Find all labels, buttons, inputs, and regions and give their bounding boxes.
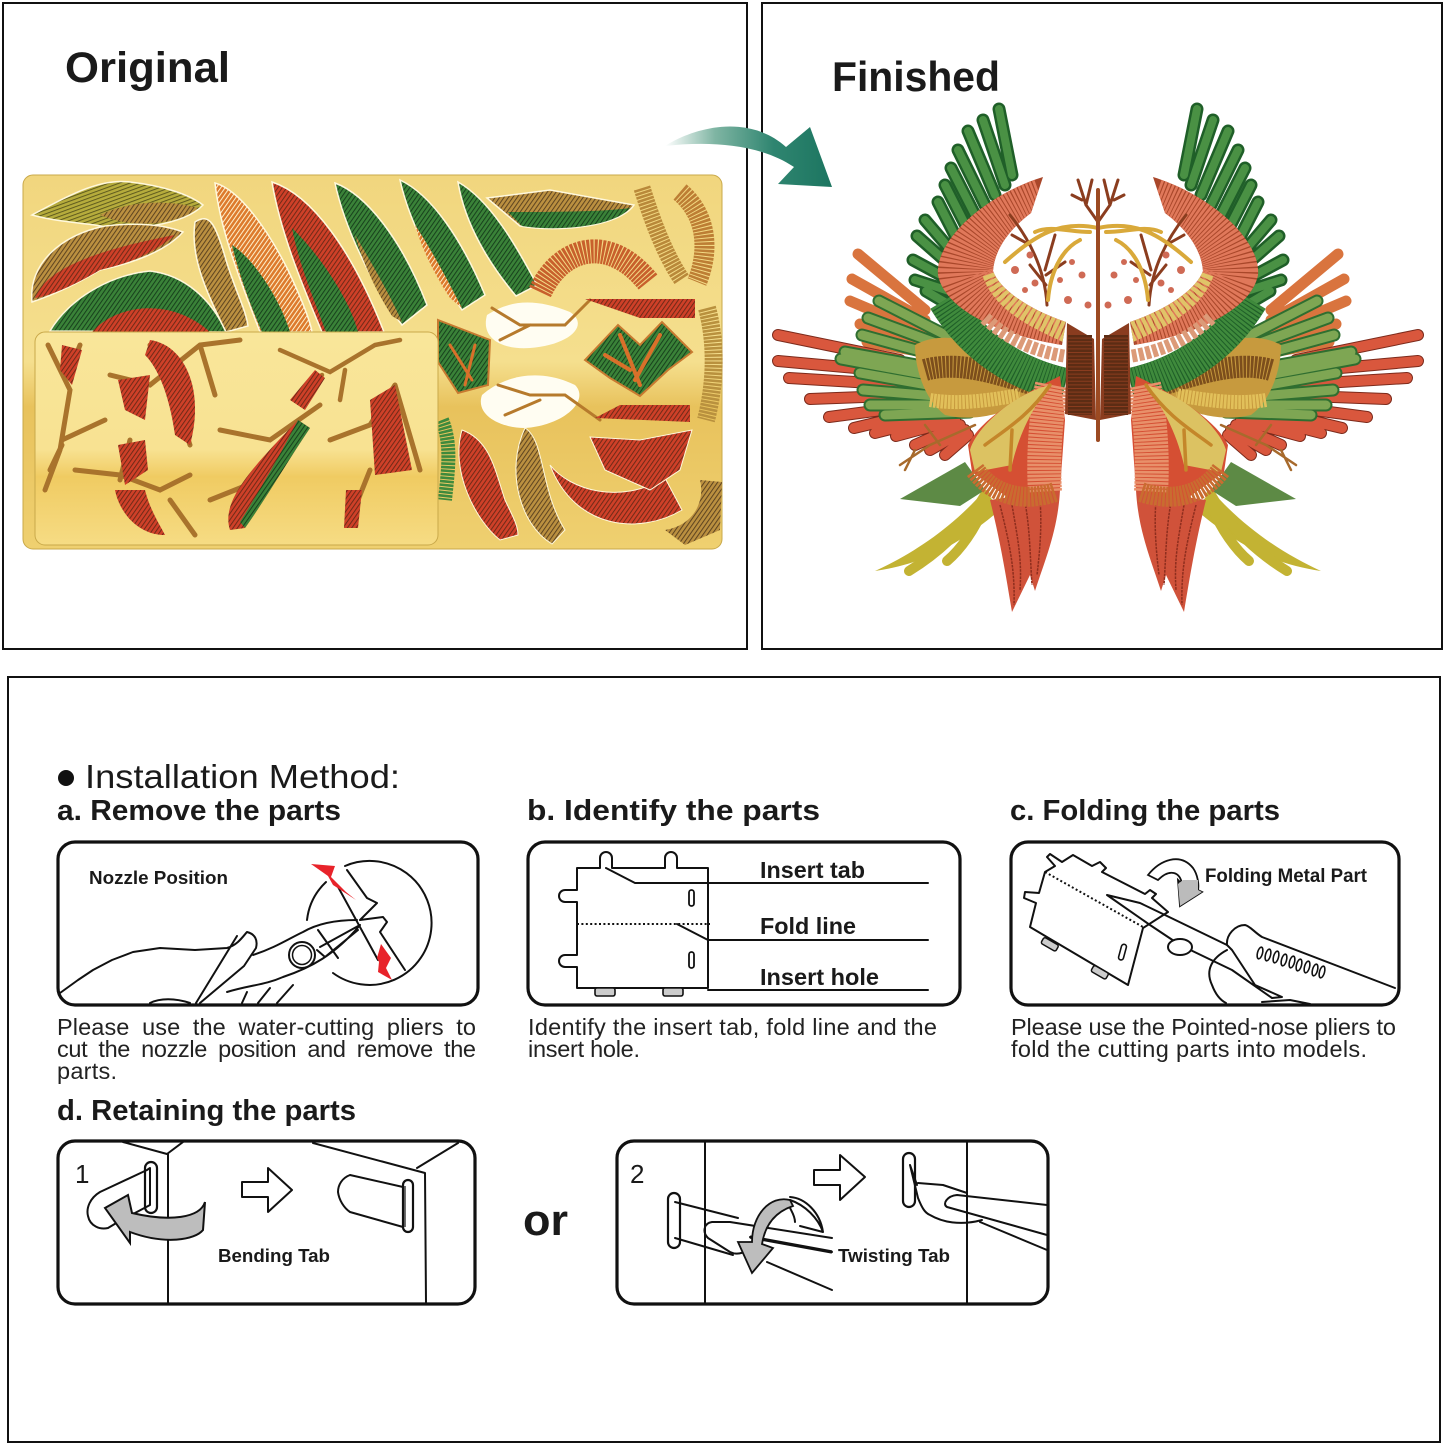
instruction a: Please use the water-cutting pliers to (57, 1014, 476, 1040)
heading a: a. Remove the parts (57, 795, 341, 827)
illustration 2: twisting tab (617, 1141, 1048, 1304)
illustration: pliers cutting nozzle: Nozzle Position (89, 868, 228, 888)
illustration 1: bending tab (58, 1141, 475, 1304)
step a (57, 795, 478, 1084)
red wing part (32, 224, 183, 302)
illustration 1: bending tab: Bending Tab (218, 1246, 330, 1266)
illustration: metal part diagram: Insert tab (760, 857, 865, 883)
heading: Finished: Finished (832, 53, 1000, 100)
illustration: folding with pointed-nose pliers (1011, 842, 1399, 1005)
branch of small tree on wing (900, 425, 975, 470)
metal sheet with uncut parts (23, 175, 722, 549)
panel: finished (762, 3, 1442, 649)
word: or: or (523, 1196, 568, 1245)
step d (57, 1095, 1048, 1304)
orange feather band of upper wing (938, 177, 1068, 356)
heading: Original: Original (65, 44, 230, 92)
instruction b (528, 1014, 937, 1062)
illustration: metal part diagram (528, 842, 960, 1005)
green feathers of upper wing (913, 109, 1065, 385)
lower yellow and green tail feathers (875, 462, 1000, 571)
instruction c: Please use the Pointed-nose pliers to (1011, 1014, 1396, 1040)
white tree parts (481, 300, 600, 428)
lower wing golden section and red feathers (968, 376, 1065, 502)
instruction b: insert hole. (528, 1036, 640, 1062)
illustration: pliers cutting nozzle (58, 842, 478, 1005)
illustration 1: bending tab: 1 (75, 1159, 89, 1189)
heading b: b. Identify the parts (527, 795, 820, 827)
lower right wing parts (442, 420, 722, 545)
illustration 2: twisting tab: Twisting Tab (838, 1246, 950, 1266)
orange upper feathers of middle wing (850, 254, 940, 355)
instruction a (57, 1014, 476, 1084)
green and red wing part (50, 271, 226, 332)
side tree and antler (1005, 180, 1098, 308)
illustration: folding with pointed-nose pliers: Folding Metal Part (1205, 866, 1368, 887)
assembled phoenix model (778, 109, 1418, 612)
centre spire (1096, 190, 1100, 440)
brown centre panel (1065, 323, 1096, 420)
heading c: c. Folding the parts (1010, 795, 1280, 827)
bullet heading: Installation Method: (85, 758, 400, 795)
yellow green wing part (32, 181, 203, 228)
red tail (990, 490, 1060, 612)
illustration: metal part diagram: Insert hole (760, 964, 879, 990)
instruction c: fold the cutting parts into models. (1011, 1036, 1367, 1062)
branch parts (45, 340, 420, 535)
panel: original (3, 3, 747, 649)
instruction b: Identify the insert tab, fold line and the (528, 1014, 937, 1040)
golden body of middle wing (915, 338, 1045, 418)
left half of phoenix (778, 109, 1098, 612)
green arrow from original to finished (665, 127, 832, 187)
right half of phoenix (1098, 109, 1418, 612)
panel: installation method (8, 677, 1440, 1442)
illustration 2: twisting tab: 2 (630, 1159, 644, 1189)
red strips and green diamond (438, 299, 695, 422)
instruction a: cut the nozzle position and remove the (57, 1036, 476, 1062)
step c (1010, 795, 1399, 1062)
long feather parts (194, 180, 714, 420)
step b (527, 795, 960, 1062)
instruction a: parts. (57, 1058, 117, 1084)
small metal sheet (35, 332, 438, 545)
illustration: metal part diagram: Fold line (760, 913, 856, 939)
instruction c (1011, 1014, 1396, 1062)
heading d: d. Retaining the parts (57, 1095, 356, 1127)
red long feathers of middle wing (778, 335, 968, 455)
green feathers of middle wing (841, 301, 970, 415)
